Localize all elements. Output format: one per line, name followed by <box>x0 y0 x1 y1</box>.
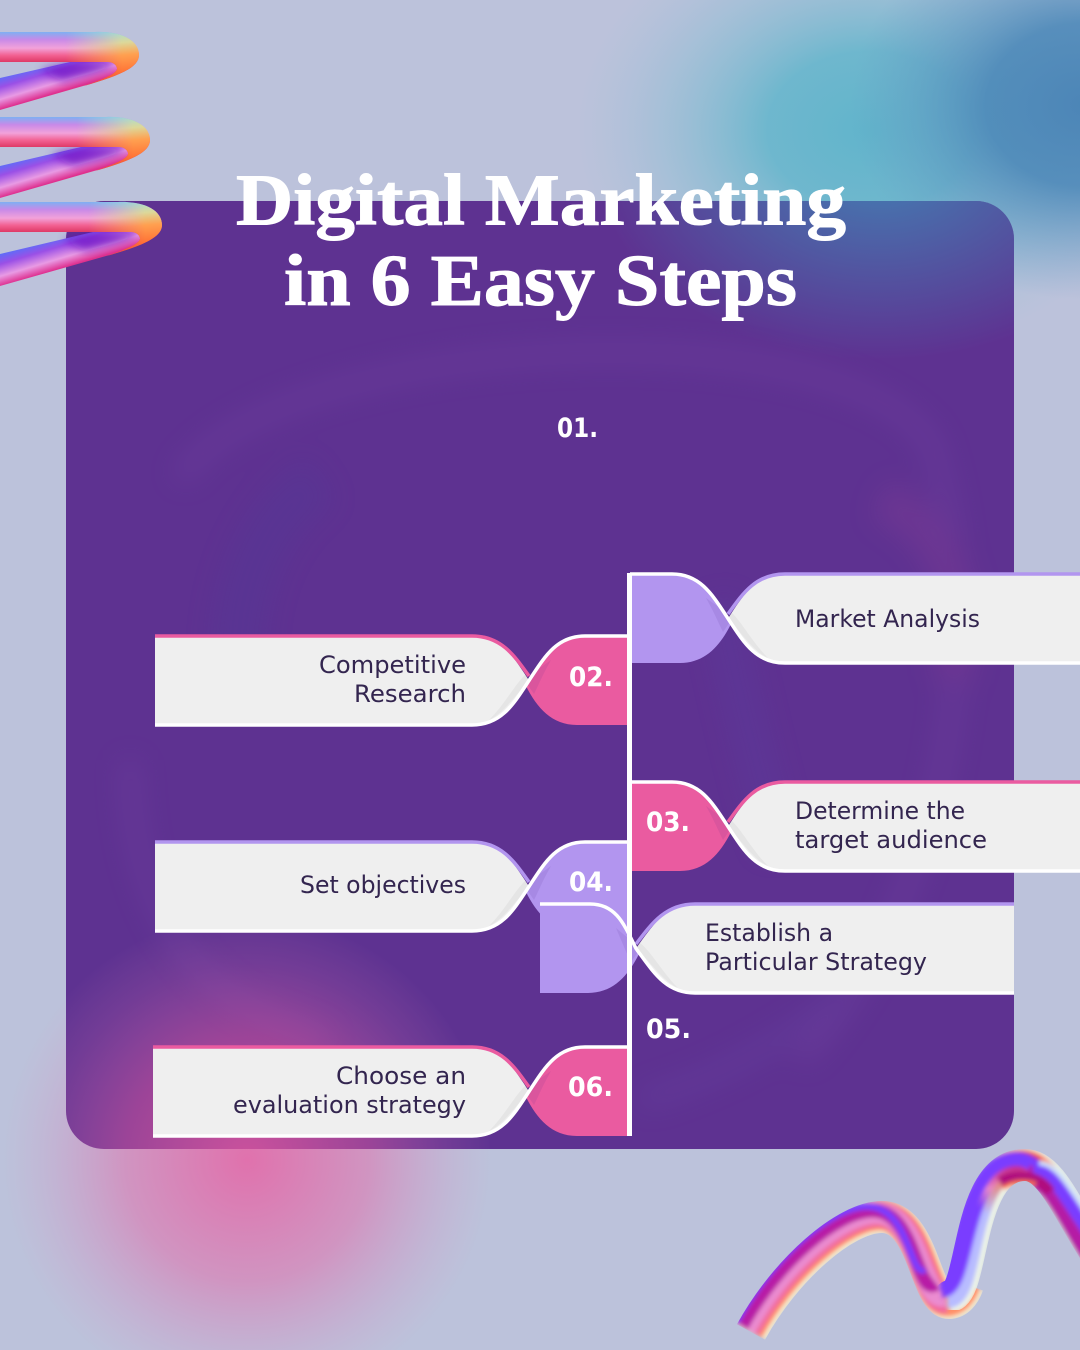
step 03 label: target audience <box>795 826 987 854</box>
step 03: Determine the target audience ribbon <box>630 782 1080 871</box>
step 06 label: evaluation strategy <box>233 1091 466 1119</box>
step 06 label <box>233 1062 466 1119</box>
step 02 label <box>319 651 466 708</box>
step 04 number: 04. <box>569 867 613 898</box>
step 01 label: Market Analysis <box>795 605 980 633</box>
panel: purple card <box>66 201 1014 1149</box>
step 03 number: 03. <box>646 807 690 838</box>
title <box>236 160 846 321</box>
step 02 label: Research <box>354 680 466 708</box>
title: Digital Marketing <box>236 160 846 240</box>
step 05: Establish a Particular Strategy ribbon <box>540 904 1014 993</box>
pink gradient blob <box>2 915 492 1350</box>
step 02 label: Competitive <box>319 651 466 679</box>
step 06 number: 06. <box>568 1072 613 1103</box>
step 05 label: Establish a <box>705 919 833 947</box>
decoration: coil tube 3 <box>0 202 162 286</box>
step 04: Set objectives ribbon <box>155 842 627 931</box>
title: in 6 Easy Steps <box>284 240 797 321</box>
step 05 label <box>705 919 927 976</box>
step 05 number: 05. <box>646 1014 691 1045</box>
step 06: Choose an evaluation strategy ribbon <box>153 1047 627 1136</box>
step 01 number: 01. <box>557 413 598 444</box>
teal gradient blob <box>575 0 1080 355</box>
central vertical timeline line <box>627 573 632 1136</box>
step 01: Market Analysis ribbon <box>630 574 1080 663</box>
step 05 label: Particular Strategy <box>705 948 927 976</box>
step 06 label: Choose an <box>336 1062 466 1090</box>
step 04 label: Set objectives <box>300 871 466 899</box>
decoration: coil tube 2 <box>0 117 150 198</box>
step 02 number: 02. <box>569 662 613 693</box>
step 02: Competitive Research ribbon <box>155 636 627 725</box>
decoration: coil tube 1 <box>0 32 139 110</box>
step 03 label <box>795 797 987 854</box>
step 03 label: Determine the <box>795 797 965 825</box>
decoration: squiggle tube <box>736 1159 1080 1332</box>
